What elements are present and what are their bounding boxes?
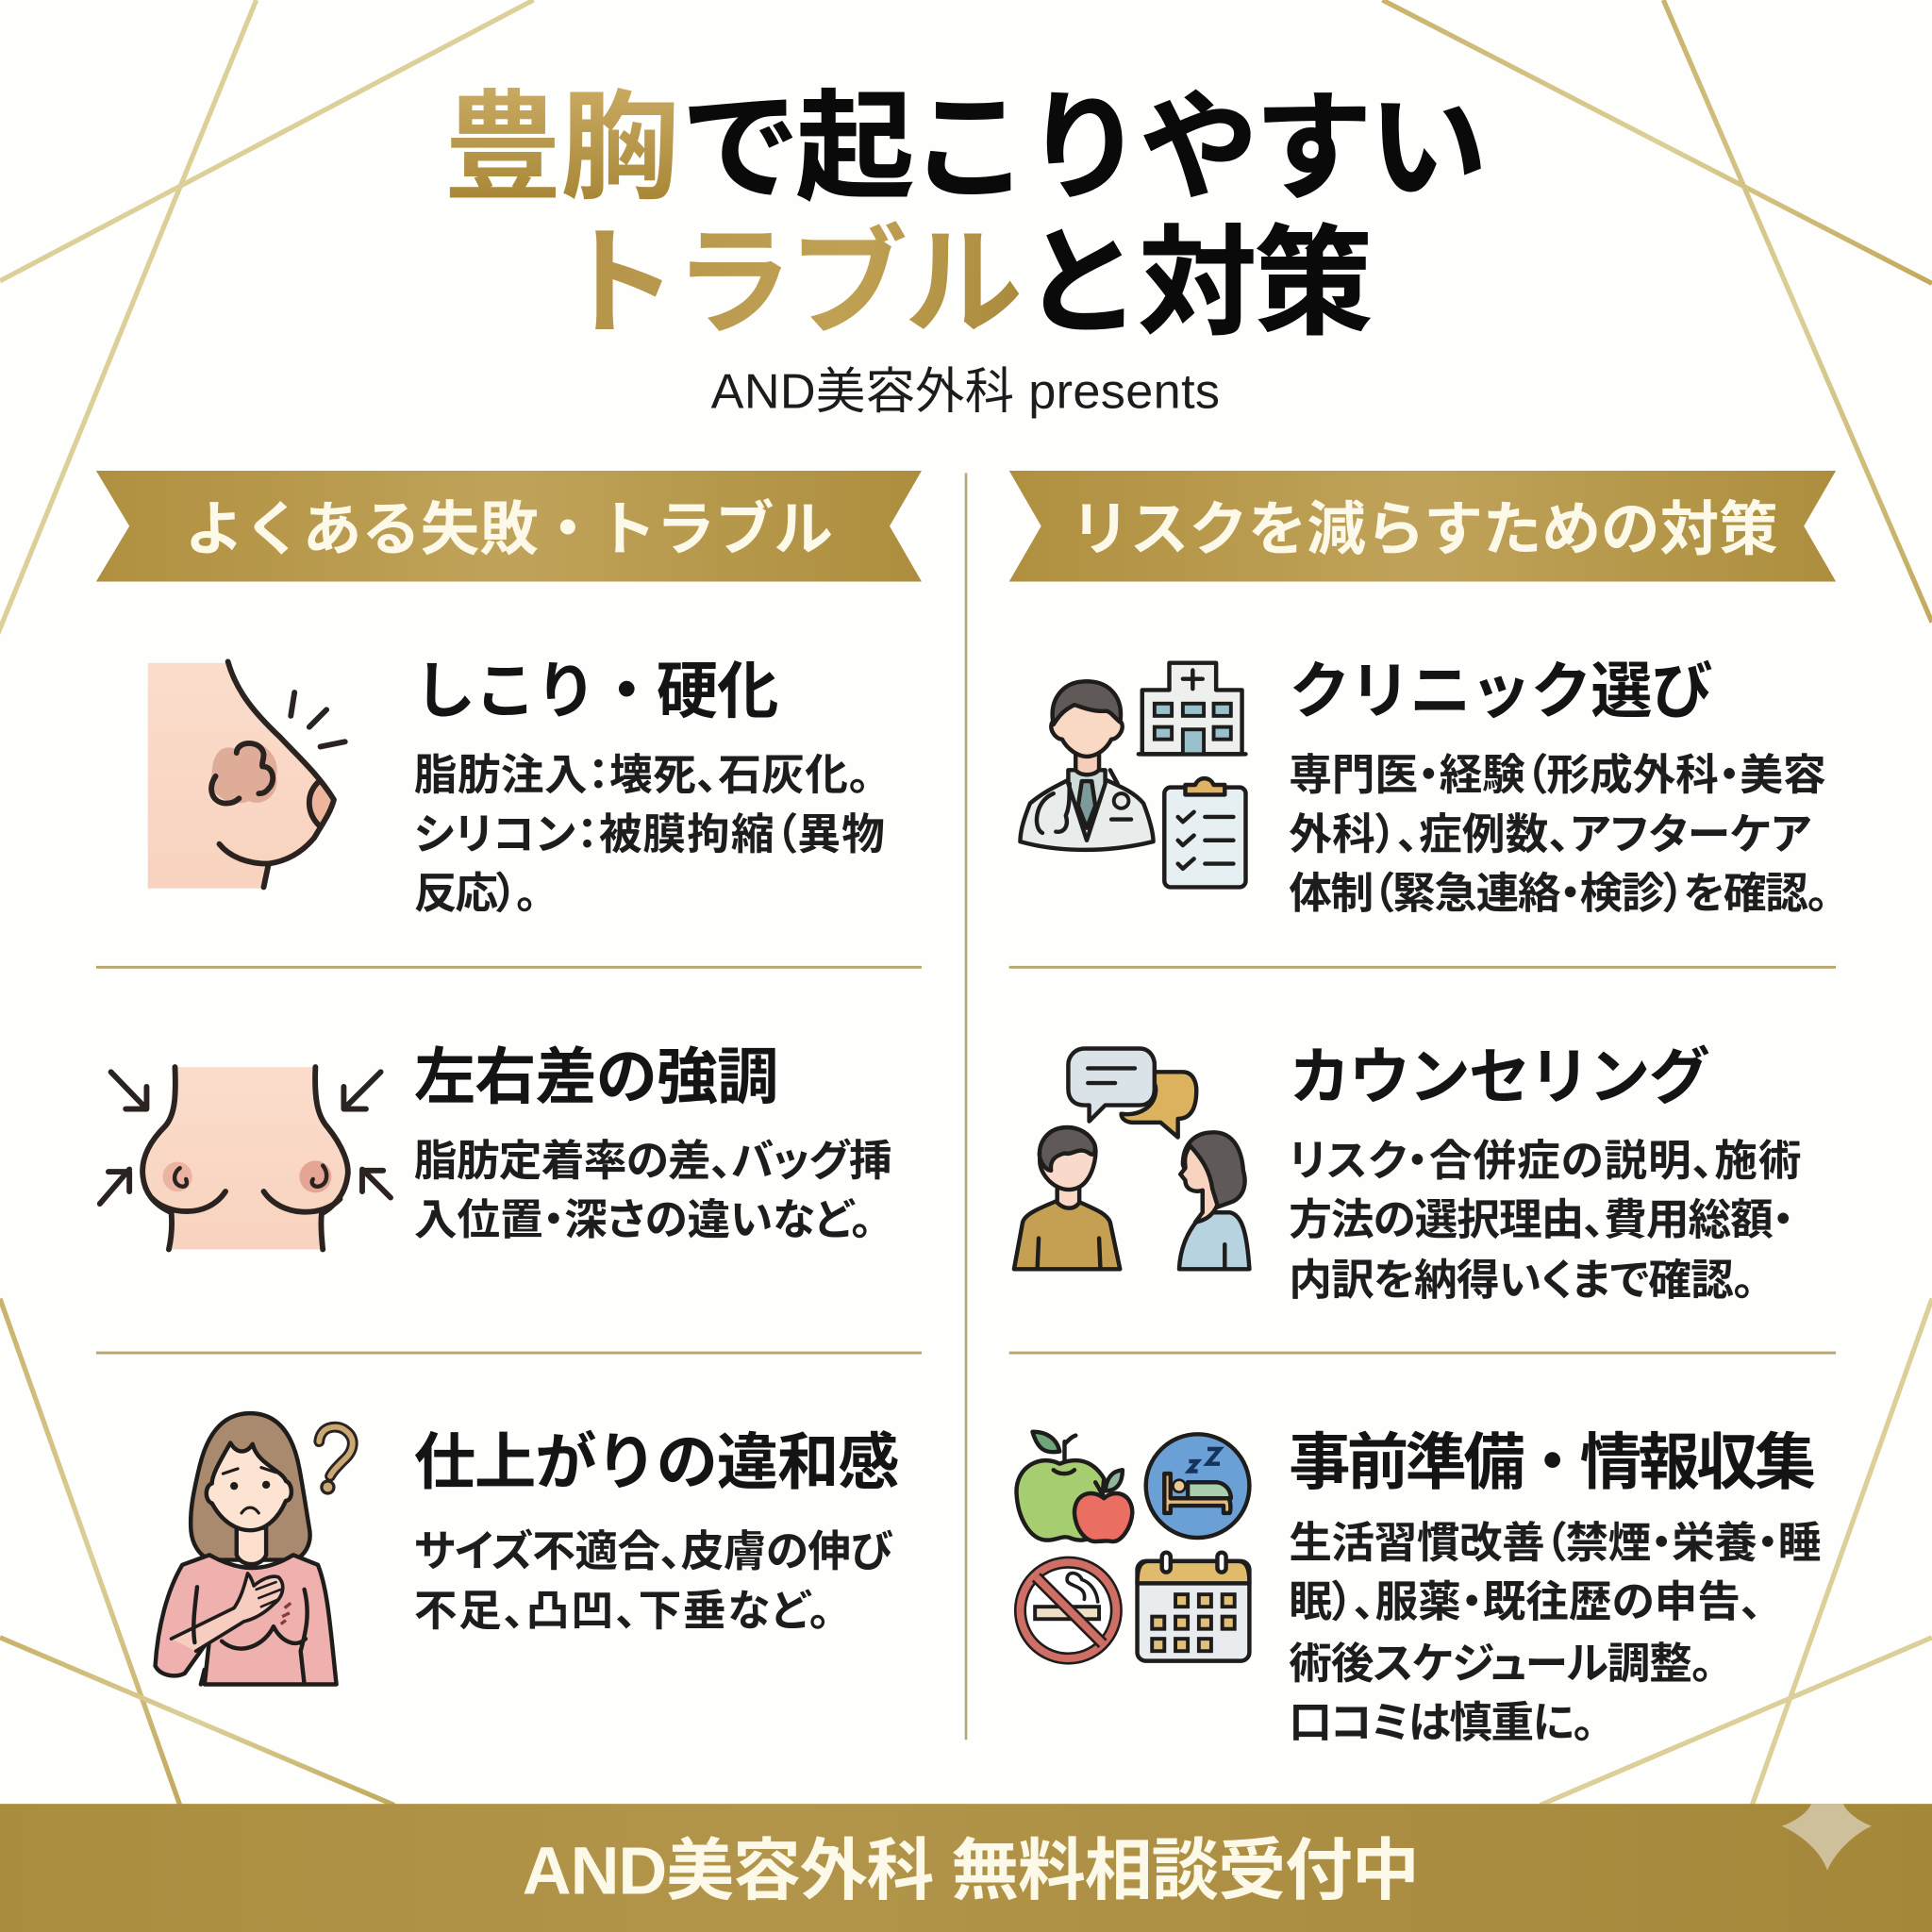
icon: doctor, hospital and checklist — [1020, 663, 1245, 887]
body text — [414, 751, 885, 918]
panel: unnatural result — [156, 1413, 899, 1684]
title: と対策 — [1023, 217, 1373, 350]
body text: 入位置・深さの違いなど。 — [414, 1196, 873, 1244]
title — [443, 81, 1487, 350]
body text: 内訳を納得いくまで確認。 — [1289, 1257, 1755, 1305]
heading: 事前準備・情報収集 — [1289, 1428, 1816, 1497]
banner: common troubles: よくある失敗・トラブル — [185, 497, 833, 563]
panel: choosing a clinic — [1020, 657, 1828, 918]
icon: sparkle — [1782, 1804, 1872, 1871]
body text: 体制（緊急連絡・検診）を確認。 — [1289, 870, 1828, 918]
subtitle: AND美容外科 presents — [711, 364, 1220, 419]
heading: 仕上がりの違和感 — [414, 1428, 899, 1497]
body text: シリコン：被膜拘縮（異物 — [414, 810, 885, 858]
body text: 口コミは慎重に。 — [1289, 1699, 1594, 1747]
panel: counseling — [1014, 1042, 1802, 1305]
panel: preparation and information — [1017, 1428, 1821, 1747]
body text — [414, 1527, 892, 1635]
body text: 術後スケジュール調整。 — [1289, 1640, 1713, 1688]
panel: lumps and hardening — [148, 657, 885, 918]
heading: 左右差の強調 — [414, 1042, 778, 1111]
body text: 方法の選択理由、費用総額・ — [1289, 1196, 1794, 1244]
banner: common troubles — [96, 471, 922, 581]
panel: left-right difference — [100, 1042, 892, 1249]
body text: 反応）。 — [414, 870, 537, 918]
title: 豊胸 — [443, 81, 679, 214]
body text: リスク・合併症の説明、施術 — [1289, 1137, 1802, 1185]
title: トラブル — [559, 217, 1023, 350]
banner: countermeasures: リスクを減らすための対策 — [1071, 497, 1778, 563]
heading: クリニック選び — [1289, 657, 1713, 725]
center divider — [965, 474, 967, 1740]
banner: countermeasures — [1009, 471, 1836, 581]
body text — [1289, 1137, 1802, 1305]
icon: two people talking with speech bubbles — [1014, 1049, 1249, 1269]
body text: 専門医・経験（形成外科・美容 — [1289, 751, 1826, 799]
heading: しこり・硬化 — [414, 657, 778, 725]
icon: worried woman — [156, 1413, 353, 1684]
body text — [1289, 751, 1828, 918]
body text: 生活習慣改善（禁煙・栄養・睡 — [1289, 1519, 1821, 1567]
heading: カウンセリング — [1289, 1042, 1710, 1111]
body text — [414, 1137, 892, 1244]
icon: breast side view with lump — [148, 661, 345, 889]
title: で起こりやすい — [681, 81, 1487, 214]
row dividers — [96, 967, 1836, 1353]
icon: apples, sleep, no smoking, calendar — [1017, 1432, 1249, 1661]
body text — [1289, 1519, 1821, 1747]
footer text: AND美容外科 無料相談受付中 — [523, 1834, 1420, 1909]
body text: 不足、凸凹、下垂など。 — [414, 1587, 830, 1635]
icon: asymmetry torso with arrows — [100, 1067, 391, 1249]
body text: 脂肪注入：壊死、石灰化。 — [414, 751, 870, 799]
body text: 外科）、症例数、アフターケア — [1289, 810, 1811, 858]
body text: 脂肪定着率の差、バッグ挿 — [414, 1137, 892, 1185]
body text: 眠）、服薬・既往歴の申告、 — [1289, 1578, 1762, 1626]
body text: サイズ不適合、皮膚の伸び — [414, 1527, 892, 1575]
footer band — [0, 1804, 1932, 1932]
